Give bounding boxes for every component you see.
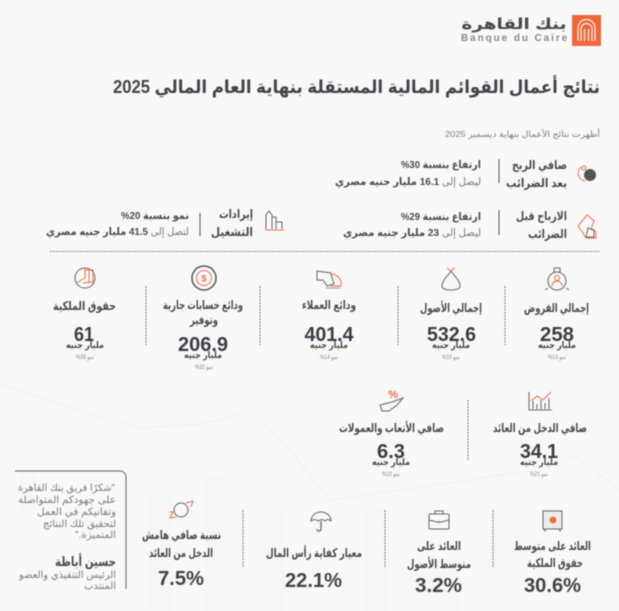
kpi: return on average assets: [407, 511, 471, 597]
kpi: return on average assets: 3.2%: [415, 575, 462, 597]
kpi: total assets: 532.6: [427, 324, 476, 346]
kpi: current and savings deposits: 206.9: [178, 334, 228, 356]
icon: briefcase: [429, 511, 449, 529]
kpi: capital adequacy ratio: معيار كفاية رأس المال: [266, 545, 362, 560]
icon: dollar cycle: $: [201, 274, 207, 284]
kpi: customer deposits: 401.4: [304, 324, 354, 346]
icon: loans: [545, 268, 569, 290]
kpi: return on average equity: 30.6%: [524, 575, 581, 597]
net profit label: صافي الربح: [512, 158, 567, 172]
pre-tax value: ليصل إلى 23 مليار جنيه مصري: [343, 227, 481, 239]
net profit value: [335, 159, 481, 188]
kpi: net interest margin: نسبة صافي هامش: [142, 528, 221, 542]
quote text: المتميزة.": [75, 530, 116, 541]
revenue label: التشغيل: [211, 225, 253, 239]
kpi: customer deposits: ودائع العملاء: [302, 298, 356, 313]
pre-tax label: الضرائب: [528, 227, 567, 241]
kpi: equity: نمو 38%: [76, 355, 94, 361]
kpi: total loans: [524, 268, 589, 361]
subtitle: أظهرت نتائج الأعمال بنهاية ديسمبر 2025: [445, 128, 600, 139]
kpi: return on average equity: [514, 511, 591, 597]
kpi: current and savings deposits: مليار جنيه: [184, 350, 222, 361]
kpi: net interest income: مليار جنيه: [520, 457, 558, 468]
kpi: current and savings deposits: [163, 266, 243, 371]
quote author: المنتدب: [84, 581, 116, 592]
net profit label: [506, 158, 567, 190]
quote text: "شكرًا فريق بنك القاهرة: [18, 483, 115, 494]
net profit value: ليصل إلى 16.1 مليار جنيه مصري: [335, 176, 481, 188]
kpi: net fees and commissions: [339, 389, 444, 478]
kpi: customer deposits: نمو 14%: [320, 355, 338, 361]
kpi: net interest income: [493, 392, 587, 478]
revenue label: [211, 207, 253, 239]
revenue value: لتصل إلى 41.5 مليار جنيه مصري: [46, 226, 189, 238]
kpi: return on average equity: العائد على متوسط: [514, 539, 591, 554]
kpi: customer deposits: مليار جنيه: [310, 340, 348, 351]
highlight: profit before tax: [343, 209, 596, 241]
revenue value: [46, 210, 189, 238]
quote author: الرئيس التنفيذي والعضو: [18, 570, 116, 581]
kpi: equity: مليار جنيه: [66, 340, 104, 351]
icon: net profit: [578, 166, 596, 181]
kpi: total assets: [420, 268, 482, 361]
icon: rising chart: [529, 392, 552, 410]
pre-tax label: [516, 209, 567, 241]
kpi: current and savings deposits: نمو 32%: [195, 365, 213, 371]
icon: revenue bars: [265, 211, 284, 230]
kpi: net fees and commissions: صافي الأتعاب والعمولات: [339, 420, 444, 436]
icon: hand deposit: [317, 271, 341, 288]
kpi: total assets: إجمالي الأصول: [420, 300, 482, 316]
kpi: current and savings deposits: ودائع حسابات جارية: [163, 298, 243, 313]
icon: umbrella: [311, 512, 331, 531]
kpi: total loans: مليار جنيه: [538, 340, 576, 351]
kpi: total loans: إجمالي القروض: [524, 301, 589, 316]
kpi: net fees and commissions: نمو 10%: [382, 472, 400, 478]
kpi: current and savings deposits: وتوفير: [189, 313, 218, 328]
logo: Banque du Caire: بنك القاهرة: [462, 16, 566, 33]
kpi: return on average equity: حقوق الملكية: [527, 556, 583, 571]
net profit value: ارتفاع بنسبة 30%: [401, 159, 481, 171]
kpi: capital adequacy ratio: [266, 512, 362, 592]
kpi: net interest income: 34.1: [520, 441, 558, 463]
quote text: لتحقيق تلك النتائج: [43, 519, 116, 530]
quote text: [18, 483, 116, 541]
kpi: customer deposits: [302, 271, 356, 361]
revenue value: نمو بنسبة 20%: [121, 210, 189, 222]
icon: money bag: [442, 268, 460, 290]
logo: Banque du Caire: [461, 15, 601, 46]
icon: hand percent: %: [388, 389, 398, 401]
kpi: net interest margin: الدخل من العائد: [149, 546, 213, 560]
icon: profit before tax: [578, 215, 596, 238]
quote author: [18, 553, 116, 592]
icon: margin: [170, 501, 193, 518]
kpi: total assets: نمو 10%: [442, 355, 460, 361]
kpi: net interest margin: [142, 501, 221, 590]
kpi: net fees and commissions: 6.3: [377, 441, 405, 463]
icon: pie: [75, 268, 95, 288]
kpi: return on average assets: متوسط الأصول: [407, 556, 471, 572]
icon: safe: [543, 511, 562, 531]
kpi: net interest margin: 7.5%: [158, 568, 204, 590]
quote author: حسين أباظة: [55, 553, 116, 569]
quote box: [15, 471, 126, 592]
kpi: total loans: نمو 13%: [548, 355, 566, 361]
kpi: total loans: 258: [540, 324, 574, 346]
kpi: equity: [53, 268, 116, 361]
kpi: net fees and commissions: مليار جنيه: [372, 457, 410, 468]
logo: Banque du Caire: Banque du Caire: [461, 33, 568, 44]
kpi: equity: 61: [74, 324, 94, 346]
kpi: net interest income: نمو 21%: [530, 472, 548, 478]
kpi: equity: حقوق الملكية: [53, 299, 116, 314]
pre-tax value: [343, 211, 481, 239]
highlight: net profit after tax: [335, 158, 596, 190]
kpi: return on average assets: العائد على: [417, 539, 461, 553]
revenue label: إيرادات: [219, 207, 253, 221]
kpi: capital adequacy ratio: 22.1%: [285, 570, 342, 592]
quote text: وتفانيكم في العمل: [37, 507, 116, 518]
highlight: operating revenue: [46, 207, 284, 239]
pre-tax label: الارباح قبل: [516, 209, 567, 223]
quote text: على جهودكم المتواصلة: [18, 495, 116, 506]
kpi: total assets: مليار جنيه: [432, 340, 470, 351]
pre-tax value: ارتفاع بنسبة 29%: [401, 211, 481, 223]
net profit label: بعد الضرائب: [506, 176, 567, 190]
